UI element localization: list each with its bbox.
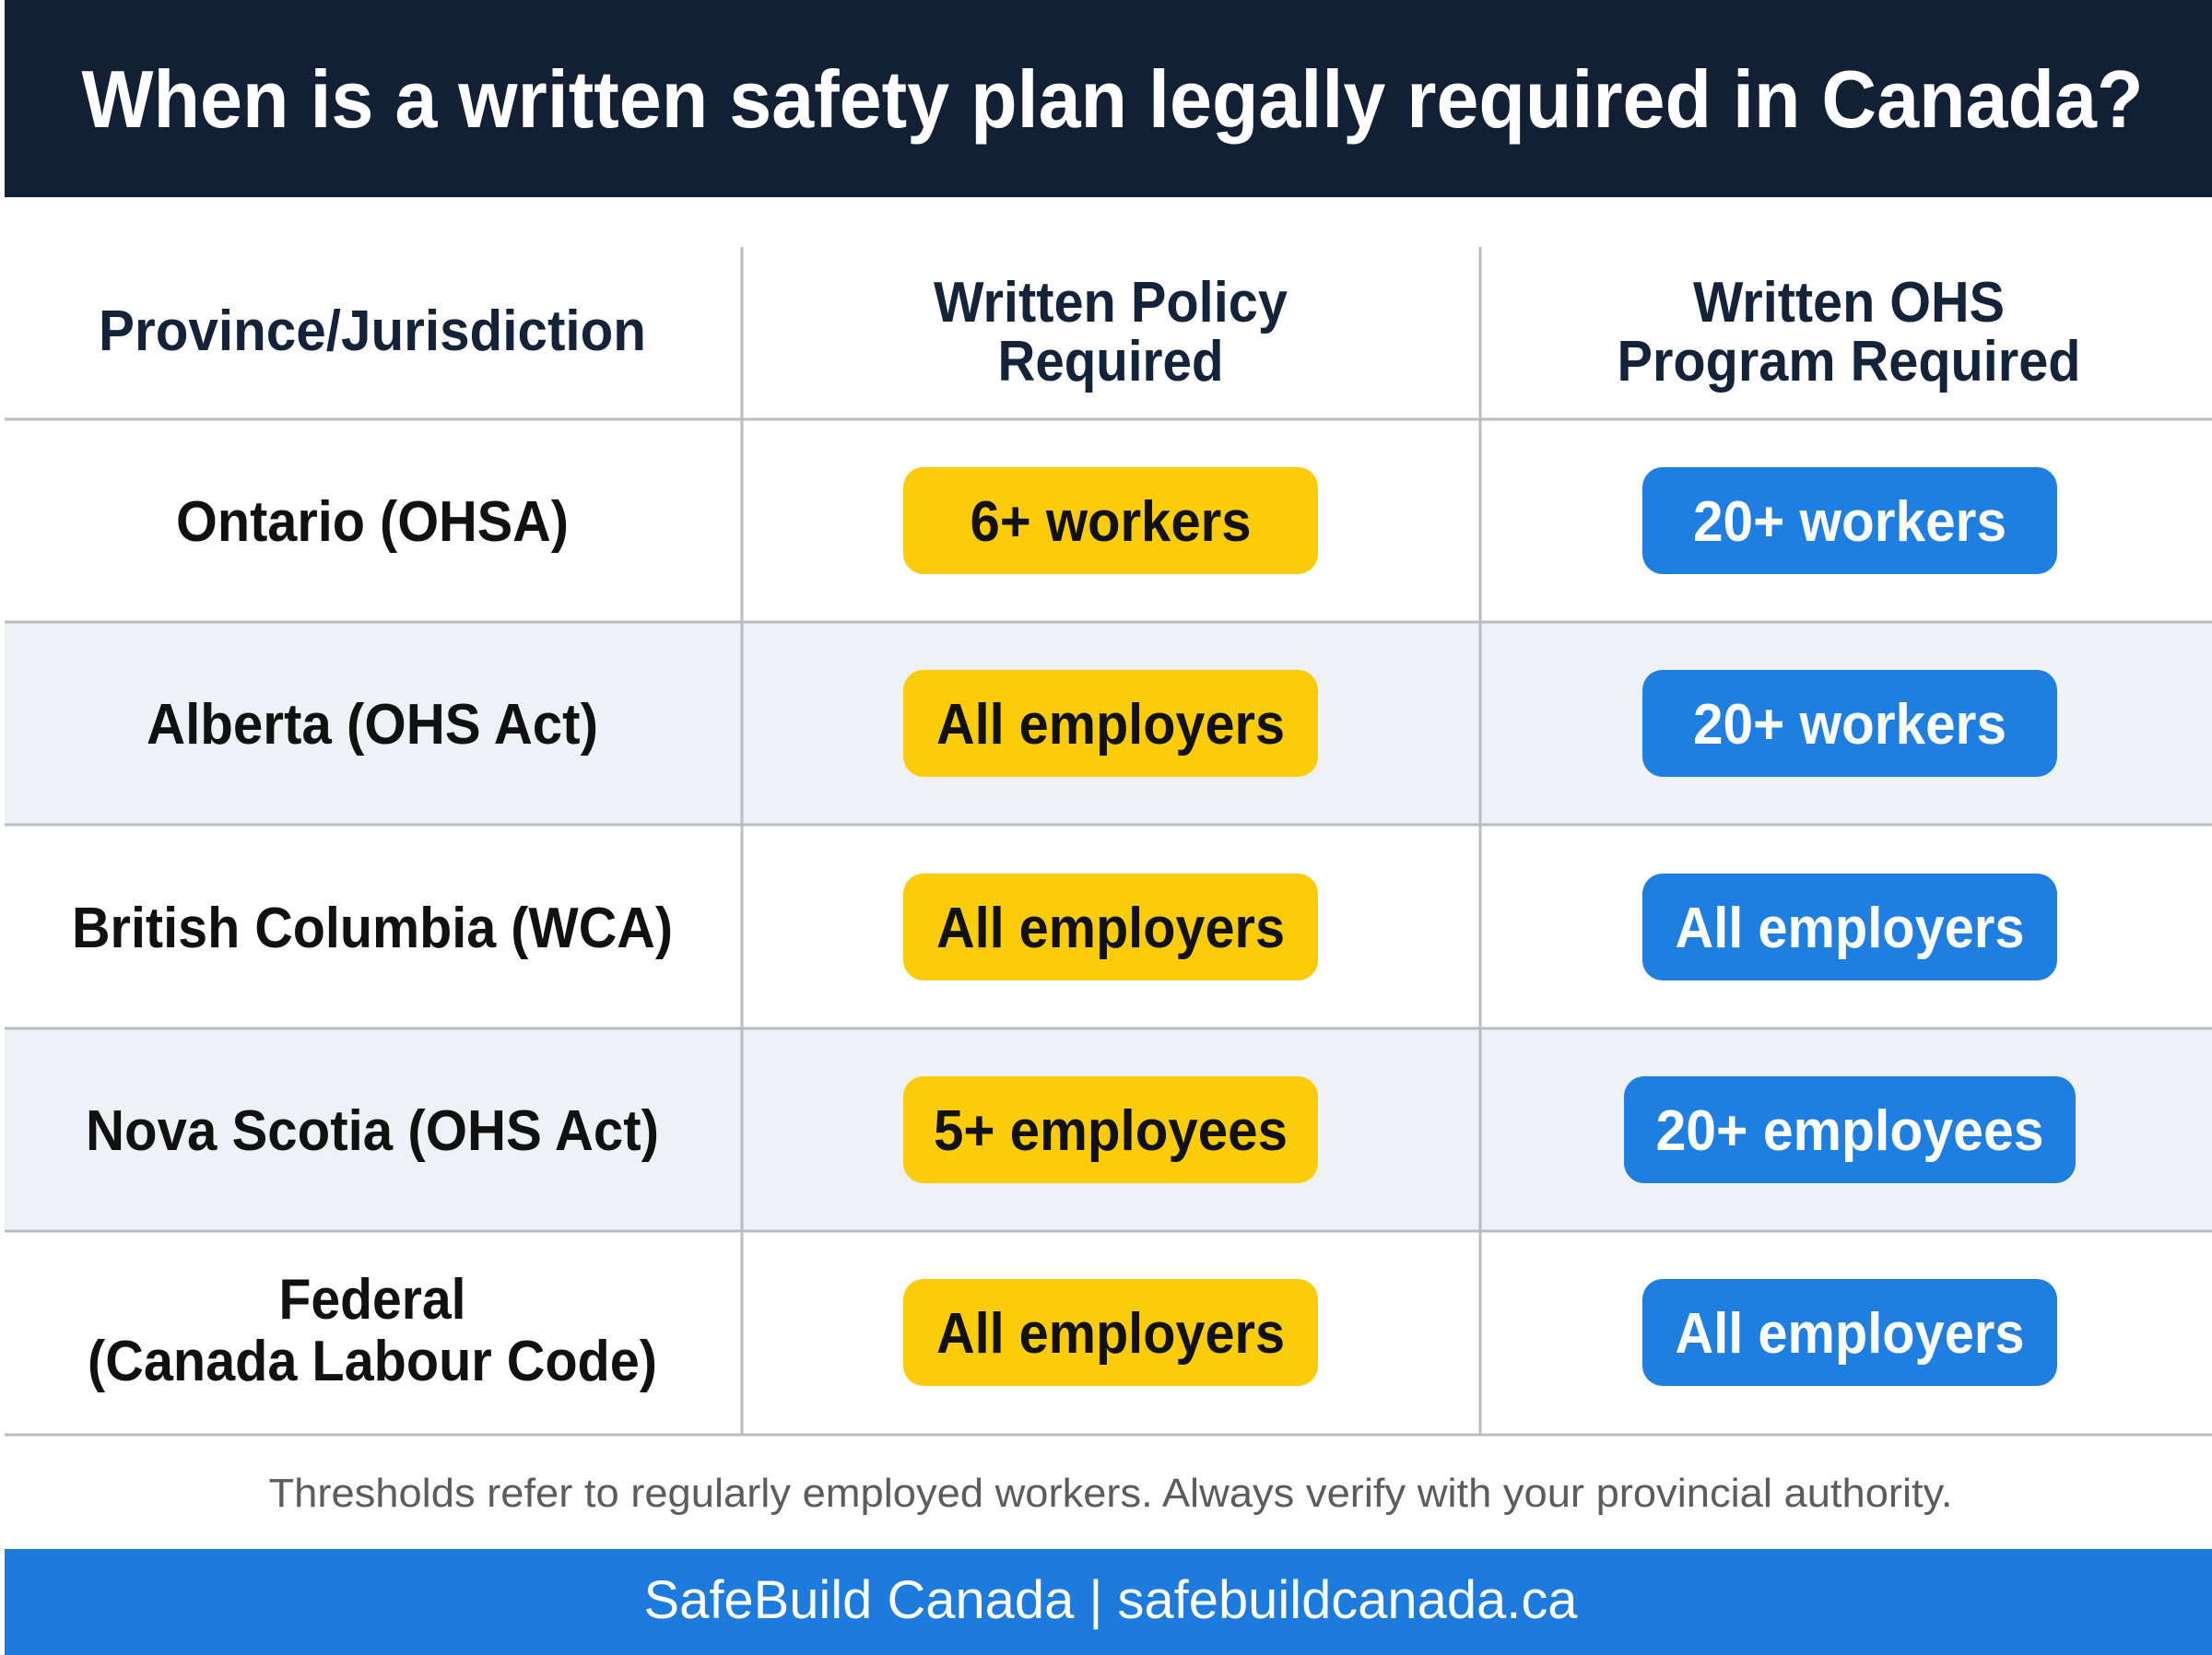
- row labels: Alberta (OHS Act): [147, 693, 598, 757]
- header: written policy: Required: [997, 330, 1224, 393]
- blue pills: OHS program: All employers: [1676, 897, 2024, 960]
- footer bar: [5, 1549, 2212, 1655]
- row labels: Federal: [278, 1268, 466, 1332]
- blue pills: OHS program: All employers: [1676, 1302, 2024, 1366]
- yellow pills: written policy: All employers: [936, 1302, 1285, 1366]
- footer bar: SafeBuild Canada | safebuildcanada.ca: [643, 1570, 1578, 1630]
- row labels: Ontario (OHSA): [176, 490, 569, 554]
- blue pills: OHS program: 20+ workers: [1693, 693, 2006, 757]
- blue pills: OHS program: [1624, 467, 2076, 1386]
- alternating row backgrounds: [5, 622, 2212, 1231]
- footnote: Thresholds refer to regularly employed workers. Always verify with your provincial authority.: [269, 1471, 1952, 1516]
- yellow pills: written policy: All employers: [936, 897, 1285, 960]
- row labels: British Columbia (WCA): [72, 897, 673, 960]
- blue pills: OHS program: 20+ employees: [1655, 1099, 2044, 1163]
- blue pills: OHS program: 20+ workers: [1693, 490, 2006, 554]
- row labels: [72, 490, 673, 1393]
- header: written OHS program: [1617, 271, 2081, 393]
- yellow pills: written policy: All employers: [936, 693, 1285, 757]
- yellow pills: written policy: 6+ workers: [970, 490, 1252, 554]
- header: written policy: Written Policy: [934, 271, 1288, 335]
- yellow pills: written policy: [903, 467, 1318, 1386]
- header: written policy: [934, 271, 1288, 393]
- row labels: Nova Scotia (OHS Act): [86, 1099, 659, 1163]
- header: written OHS program: Written OHS: [1693, 271, 2005, 335]
- row labels: (Canada Labour Code): [88, 1330, 657, 1393]
- header: province: Province/Jurisdiction: [99, 299, 646, 363]
- table header: [99, 271, 2081, 393]
- title: When is a written safety plan legally required in Canada?: [81, 53, 2144, 145]
- header: written OHS program: Program Required: [1617, 330, 2081, 393]
- yellow pills: written policy: 5+ employees: [934, 1099, 1288, 1163]
- title bar: [5, 0, 2212, 197]
